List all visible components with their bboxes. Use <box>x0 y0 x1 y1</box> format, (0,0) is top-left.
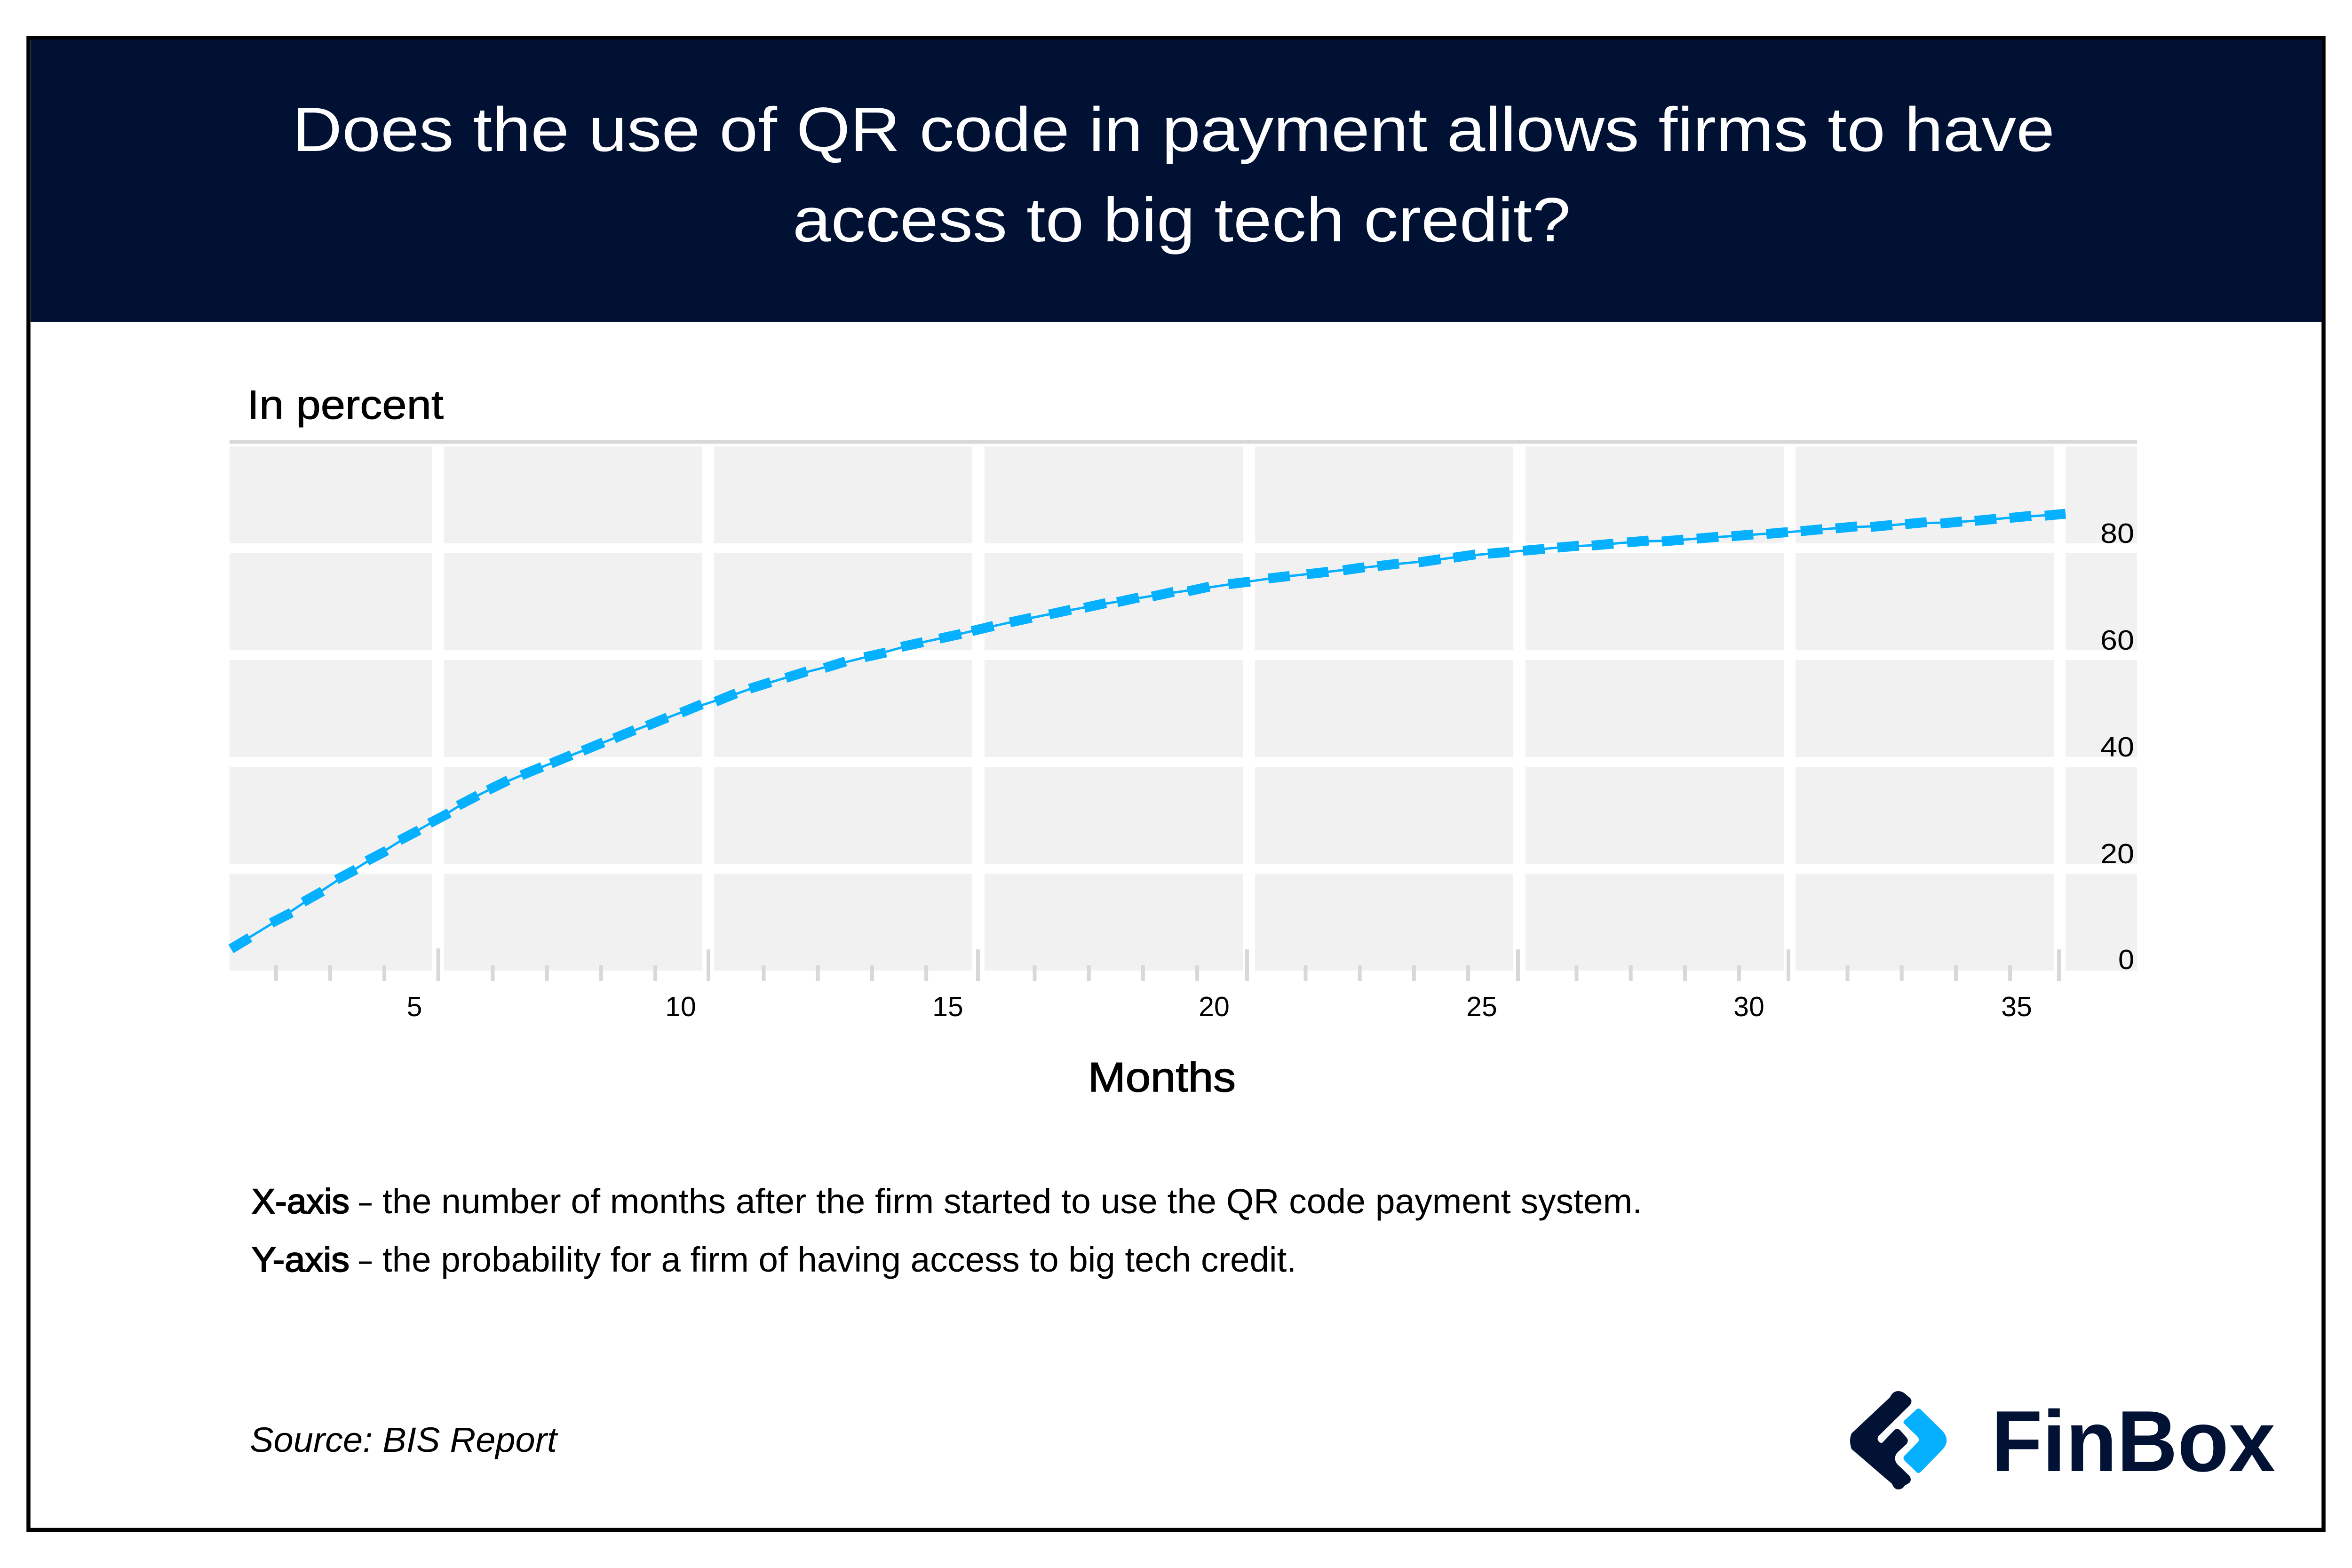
y-axis labels: 40 <box>2100 732 2134 763</box>
axis notes <box>252 1182 1642 1279</box>
x-axis labels: 20 <box>1199 991 1230 1022</box>
x-axis labels: 35 <box>2001 991 2032 1022</box>
note: x-axis: – <box>359 1182 372 1221</box>
x-axis labels: 10 <box>665 991 696 1022</box>
x-axis labels: 25 <box>1466 991 1497 1022</box>
x-axis labels: 5 <box>407 991 422 1022</box>
curve: thin line <box>232 514 2066 948</box>
chart top rule <box>230 440 2137 444</box>
title: access to big tech credit? <box>793 185 1571 255</box>
y-axis unit label: In percent <box>247 382 444 428</box>
title <box>292 95 2055 255</box>
note: x-axis: the number of months after the firm started to use the QR code payment system. <box>382 1182 1642 1221</box>
y-axis labels: 20 <box>2100 838 2134 869</box>
x-axis title: Months <box>1088 1054 1236 1100</box>
x-axis labels: 30 <box>1733 991 1764 1022</box>
note: y-axis: – <box>359 1240 372 1279</box>
note: y-axis: Y-axis <box>252 1240 350 1279</box>
x-axis labels: 15 <box>932 991 963 1022</box>
logo wordmark: FinBox <box>1991 1393 2275 1489</box>
curve: dashes <box>231 514 2066 949</box>
y-axis labels: 60 <box>2100 625 2134 656</box>
x-axis tick marks <box>276 948 2059 981</box>
FinBox logo <box>1850 1391 2275 1489</box>
y-axis labels: 0 <box>2118 944 2134 975</box>
note: y-axis: the probability for a firm of having access to big tech credit. <box>382 1240 1296 1279</box>
logo mark <box>1850 1391 1947 1489</box>
x-axis labels <box>407 991 2032 1022</box>
line chart <box>230 440 2137 1100</box>
title: Does the use of QR code in payment allows firms to have <box>292 95 2055 165</box>
plot background grid <box>230 446 2137 971</box>
note: x-axis: X-axis <box>252 1182 350 1221</box>
y-axis labels <box>2100 518 2134 975</box>
header banner <box>31 40 2322 322</box>
source: Source: BIS Report <box>250 1420 559 1459</box>
y-axis labels: 80 <box>2100 518 2134 549</box>
